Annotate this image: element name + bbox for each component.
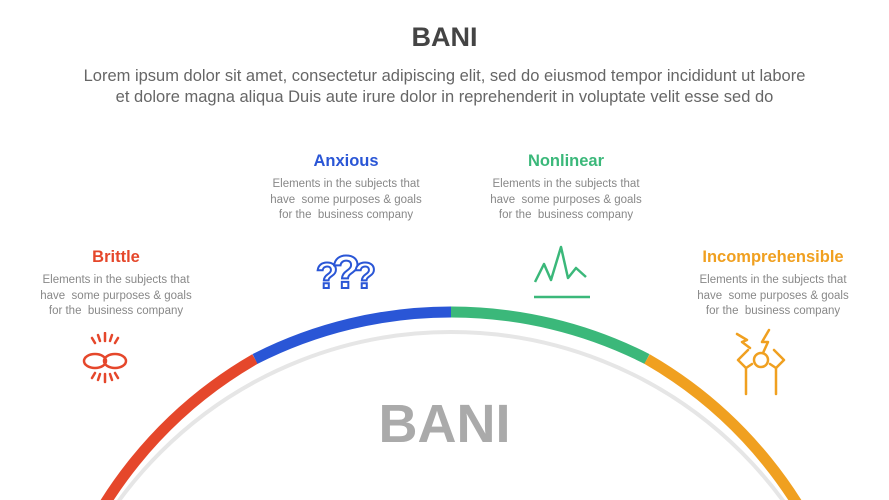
panel: brittle (40, 248, 192, 317)
subtitle: Lorem ipsum dolor sit amet, consectetur adipiscing elit, sed do eiusmod tempor incididunt ut labore (84, 67, 805, 85)
arc: brittle (60, 359, 255, 500)
panel: nonlinear: Nonlinear (528, 152, 604, 170)
icon: stressed person (736, 328, 786, 396)
arc: anxious (255, 312, 451, 359)
panel: nonlinear: Elements in the subjects that have some purposes & goals for the business company (490, 178, 642, 221)
title: BANI (412, 22, 478, 52)
arc: nonlinear (451, 312, 647, 359)
icon: line chart (534, 246, 590, 298)
panel: anxious: Elements in the subjects that have some purposes & goals for the business company (270, 178, 422, 221)
panel: incomprehensible: Incomprehensible (702, 248, 844, 266)
icon: question marks: ??? (316, 246, 370, 298)
arc: incomprehensible (647, 359, 842, 500)
panel: incomprehensible (697, 248, 849, 317)
panel: brittle: Elements in the subjects that have some purposes & goals for the business company (40, 274, 192, 317)
panel: brittle: Brittle (92, 248, 140, 266)
panel: incomprehensible: Elements in the subjects that have some purposes & goals for the business company (697, 274, 849, 317)
panel: nonlinear (490, 152, 642, 221)
subtitle: et dolore magna aliqua Duis aute irure dolor in reprehenderit in voluptate velit esse sed do (116, 88, 773, 106)
center label: BANI (378, 394, 510, 454)
panel: anxious: Anxious (313, 152, 379, 170)
panel: anxious (270, 152, 422, 221)
icon: broken chain (82, 332, 128, 384)
subtitle (84, 67, 805, 106)
